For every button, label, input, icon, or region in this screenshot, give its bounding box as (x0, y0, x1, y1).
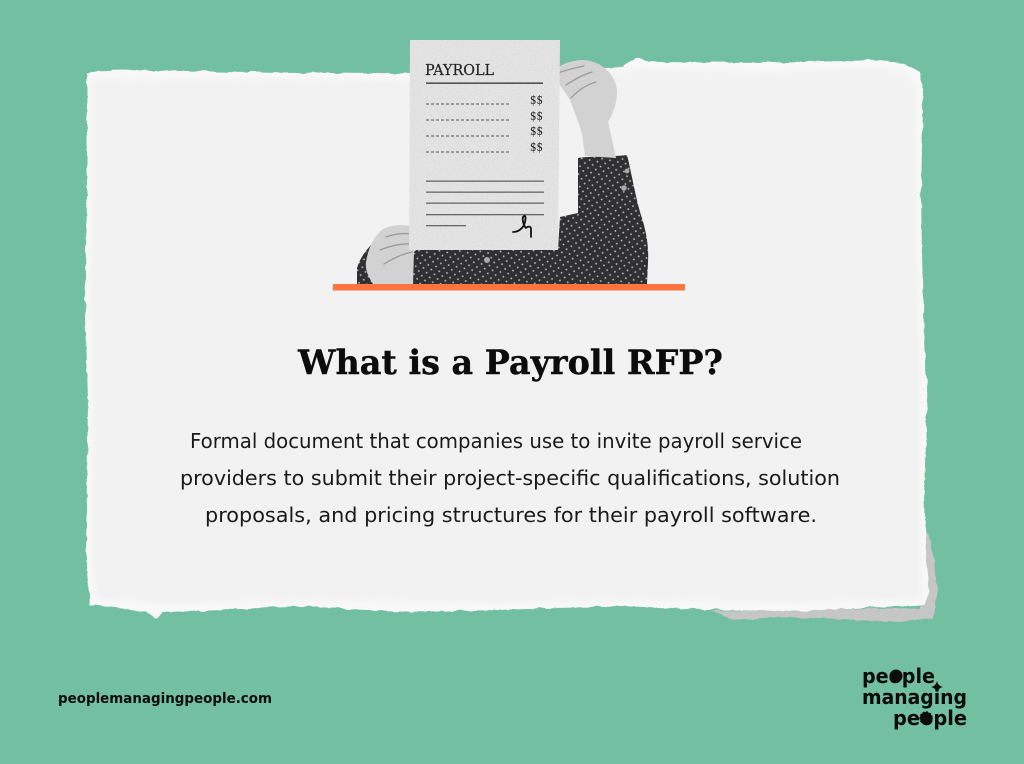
icon: signature (513, 216, 531, 237)
text lines (426, 180, 544, 226)
amounts: $$ (530, 109, 543, 123)
body text: Formal document that companies use to invite payroll service (190, 429, 802, 453)
panel: torn paper (85, 59, 938, 622)
logo: managing (862, 685, 967, 709)
paper shadow (712, 530, 938, 622)
body text (180, 429, 840, 527)
footer website: peoplemanagingpeople.com (58, 691, 272, 707)
icon: right hand (557, 60, 617, 158)
document (409, 40, 560, 250)
logo: people (862, 664, 935, 688)
amounts (530, 93, 543, 154)
amounts: $$ (530, 124, 543, 138)
document title: PAYROLL (425, 63, 494, 79)
body text: providers to submit their project-specific qualifications, solution (180, 466, 840, 490)
logo: people (893, 706, 967, 730)
dotted rows (426, 104, 510, 152)
body text: proposals, and pricing structures for their payroll software. (205, 503, 817, 527)
logo star (931, 681, 943, 693)
icon: left hand (366, 225, 421, 284)
logo solid circle (890, 670, 902, 682)
logo (862, 664, 967, 730)
heading: What is a Payroll RFP? (297, 343, 723, 383)
orange divider bar (333, 284, 685, 290)
logo flower (920, 712, 932, 724)
amounts: $$ (530, 93, 543, 107)
icon: shirt (357, 155, 648, 284)
illustration: person holding payroll document (357, 40, 648, 284)
amounts: $$ (530, 140, 543, 154)
shirt buttons (484, 169, 629, 263)
